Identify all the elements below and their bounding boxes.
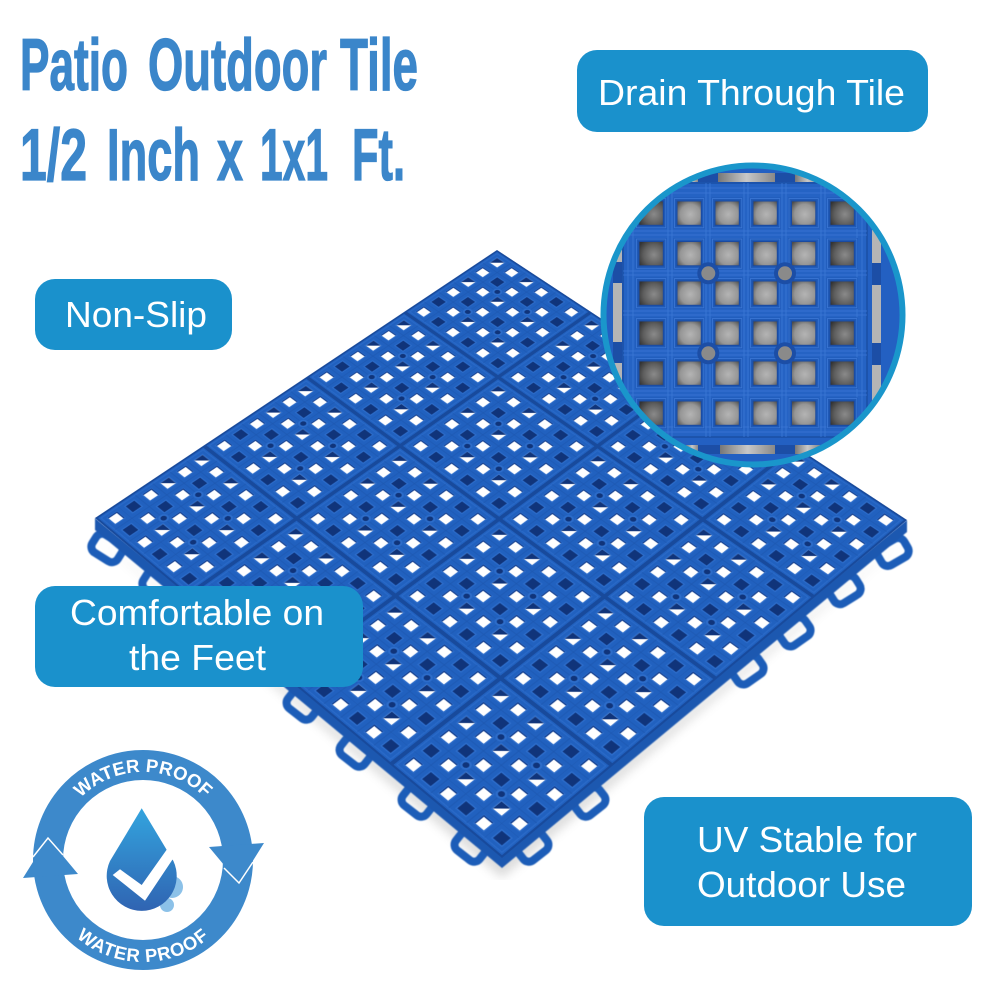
callout: Comfortable on the Feet: Comfortable on (70, 592, 324, 633)
callout: Comfortable on the Feet: the Feet (129, 637, 266, 678)
title: Tile (340, 25, 418, 106)
title: Patio (20, 25, 128, 106)
callout: UV Stable for Outdoor Use: UV Stable for (697, 819, 917, 860)
title: 1/2 (20, 115, 87, 196)
callout: UV Stable for Outdoor Use (644, 797, 972, 926)
callout: Comfortable on the Feet (35, 586, 363, 687)
callout: Non-Slip (35, 279, 232, 350)
callout: Non-Slip: Non-Slip (65, 294, 207, 335)
callout: UV Stable for Outdoor Use: Outdoor Use (697, 864, 906, 905)
title (20, 25, 418, 196)
title: Ft. (352, 115, 405, 196)
badge: water proof: WATER PROOF (78, 927, 206, 962)
badge: water proof: WATER PROOF (72, 759, 214, 796)
magnifier: tile close-up circle (600, 160, 906, 470)
callout: Drain Through Tile (577, 50, 928, 132)
title: Inch (107, 115, 200, 196)
title: Outdoor (148, 25, 327, 106)
title: 1x1 (260, 115, 328, 196)
title: x (217, 115, 243, 196)
badge: water proof (23, 750, 264, 970)
callout: Drain Through Tile: Drain Through Tile (598, 72, 905, 113)
product photo: interlocking blue tile mat (86, 250, 914, 879)
